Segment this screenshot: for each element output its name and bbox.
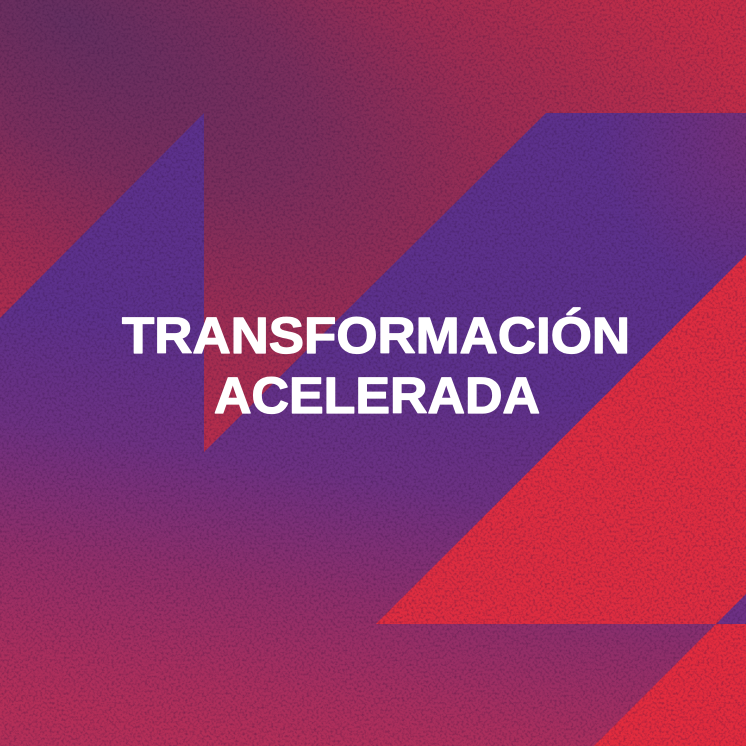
title: TRANSFORMACIÓN <box>122 307 630 364</box>
bottom right red triangle <box>594 624 746 746</box>
red triangle <box>376 255 746 624</box>
title <box>122 307 630 424</box>
title: ACELERADA <box>214 367 540 424</box>
purple tint top right <box>500 113 746 400</box>
small purple triangle <box>716 594 746 624</box>
